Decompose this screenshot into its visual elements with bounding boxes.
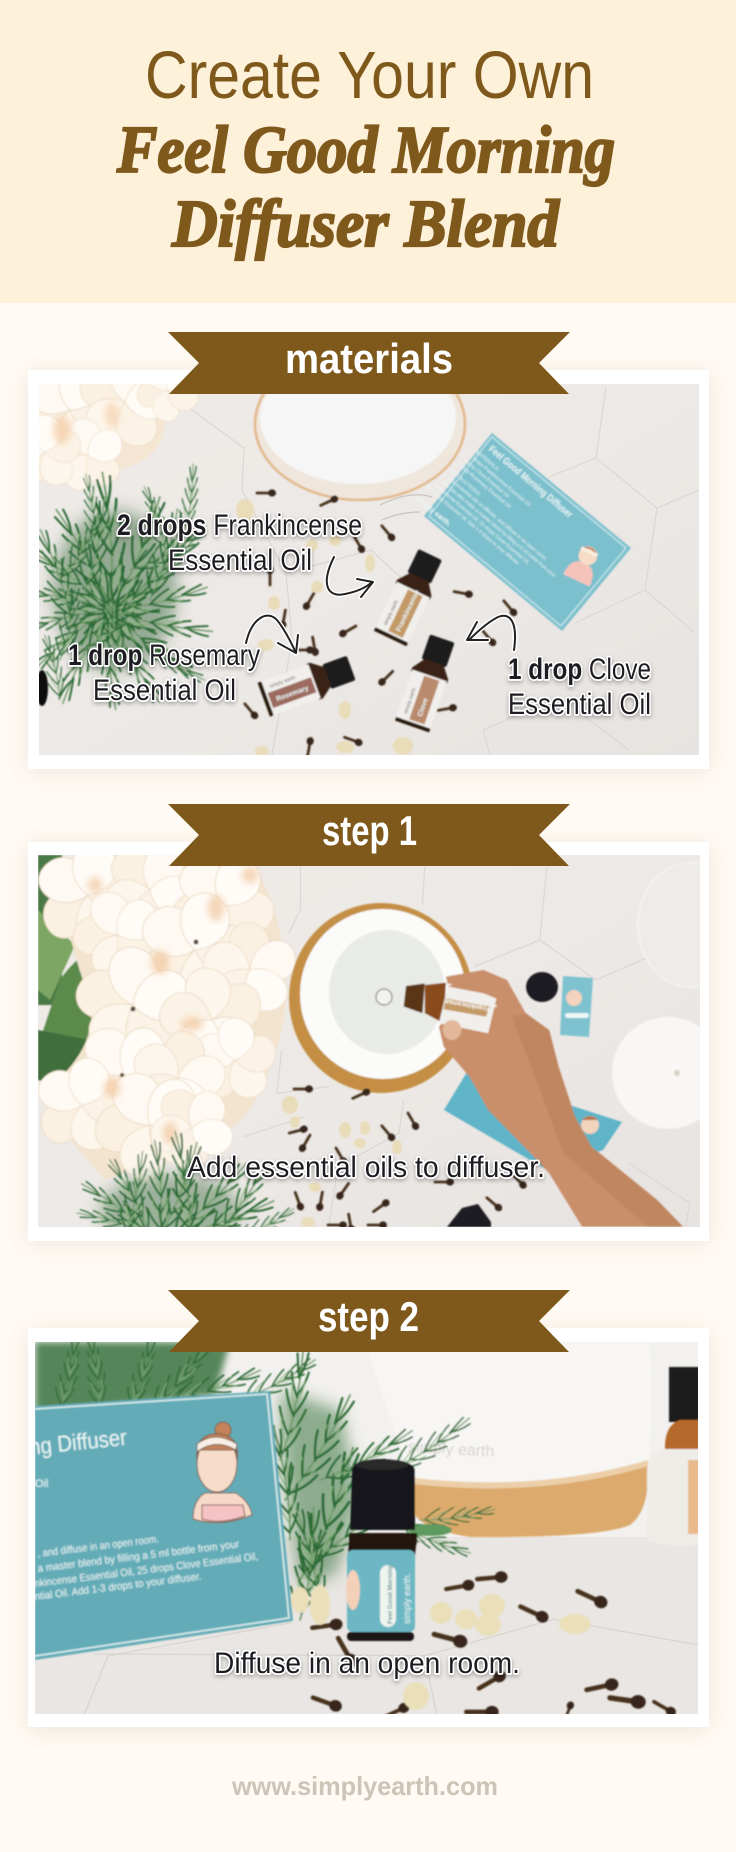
label: 1 drop rosemary: Essential Oil <box>93 674 236 707</box>
rosemary <box>76 1130 295 1227</box>
label: 2 drops frankincense: 2 drops Frankincense <box>117 509 362 542</box>
bottle: frankincense: simply earth. <box>383 598 400 626</box>
bottle: feel good morning: Feel Good Morning <box>387 1565 394 1624</box>
cloves and resin <box>236 489 519 757</box>
white diffuser <box>396 1416 648 1538</box>
flowers <box>38 855 296 1181</box>
card face icon <box>562 546 599 588</box>
cloves and resin <box>291 1571 678 1721</box>
ribbon: materials <box>168 332 570 394</box>
diffuser top view <box>253 394 467 502</box>
recipe card: Rosemary Essential Oil. Add 1-3 drops to your diffuser. <box>424 484 521 567</box>
bottle: feel good morning: simply earth. <box>402 1573 412 1624</box>
bottle label text: Frankincense <box>445 997 490 1012</box>
title: Diffuser Blend <box>171 187 560 261</box>
cloves and resin <box>282 1085 528 1233</box>
card face illustration <box>193 1422 252 1523</box>
far bottle <box>647 1367 699 1546</box>
label: 1 drop clove <box>508 653 651 721</box>
label: 1 drop rosemary <box>68 639 260 707</box>
bottle: frankincense: Frankincense <box>395 589 421 633</box>
flowers <box>39 384 199 491</box>
white diffuser: simply earth <box>408 1439 495 1461</box>
header band <box>0 0 736 303</box>
bottle: clove <box>394 632 460 733</box>
bottle: clove: Clove <box>417 697 430 718</box>
title: Feel Good Morning <box>116 113 615 187</box>
bottle: rosemary <box>257 650 358 718</box>
ribbon: step 1 <box>168 804 570 866</box>
panel: materials <box>0 332 709 769</box>
recipe card: 2 drops Frankincense Essential Oil <box>468 454 531 508</box>
title <box>116 38 615 261</box>
photo: adding oil to diffuser <box>38 855 700 1227</box>
recipe card: INSTRUCTIONS: <box>448 468 482 498</box>
recipe card <box>414 428 631 631</box>
recipe card: Feel Good Morning Diffuser <box>486 444 574 520</box>
recipe card: ntial Oil. Add 1-3 drops to your diffuser. <box>34 1571 202 1603</box>
rosemary <box>35 1333 497 1621</box>
recipe card: 2. You can also make a master blend by filling a 5 ml bottle from your <box>436 476 557 579</box>
photo: diffuse in open room <box>28 1333 699 1721</box>
hand with bottle <box>404 970 683 1227</box>
panel: step 1 <box>22 804 736 1250</box>
bottle: rosemary: simply earth. <box>269 674 297 690</box>
bottle: clove: simply earth. <box>403 686 418 715</box>
bottle: frankincense <box>373 546 447 647</box>
recipe card: 1 drop Rosemary Essential Oil <box>456 462 512 510</box>
panel: step 2 <box>28 1290 709 1727</box>
recipe card <box>28 1391 293 1660</box>
footer url: www.simplyearth.com <box>231 1771 498 1801</box>
ribbon: step 1: step 1 <box>322 807 417 854</box>
title: Create Your Own <box>145 38 594 113</box>
arrow: to rosemary <box>246 616 298 653</box>
label: 2 drops frankincense <box>117 509 362 577</box>
recipe card: Frankincense Essential Oil, 25 drops Clove Essential Oil, <box>430 480 531 566</box>
caption: step 1: Add essential oils to diffuser. <box>187 1151 545 1184</box>
arrow: to clove <box>467 616 515 650</box>
small teal card and cap <box>526 972 593 1037</box>
label: 1 drop clove: Essential Oil <box>508 688 651 721</box>
recipe card: simply earth. <box>414 495 452 528</box>
recipe card: 1 drop Clove Essential Oil <box>462 458 510 499</box>
diffuser base <box>289 903 473 1093</box>
recipe card: 1. Add essential oils to diffuser, and diffuse in an open room. <box>442 472 548 562</box>
white lid <box>612 863 700 1129</box>
arrow: to frankincense <box>327 557 373 597</box>
recipe card: nkincense Essential Oil, 25 drops Clove Essential Oil, <box>34 1551 259 1590</box>
leaves <box>38 855 92 1082</box>
recipe card: a master blend by filling a 5 ml bottle from your <box>37 1538 240 1575</box>
teal recipe card under hand <box>444 1072 622 1170</box>
recipe card: Oil <box>35 1478 48 1490</box>
ribbon: step 2: step 2 <box>318 1293 419 1340</box>
caption: step 2: Diffuse in an open room. <box>214 1647 520 1680</box>
ribbon: materials: materials <box>285 335 453 382</box>
rosemary <box>24 463 215 711</box>
photo: materials flat lay <box>39 384 699 755</box>
recipe card: ng Diffuser <box>28 1424 128 1460</box>
recipe card: MATERIALS: <box>474 449 501 473</box>
recipe card: , and diffuse in an open room. <box>37 1533 159 1560</box>
ribbon: step 2 <box>168 1290 570 1352</box>
label: 2 drops frankincense: Essential Oil <box>168 544 312 577</box>
bottle: feel good morning <box>346 1459 417 1641</box>
label: 1 drop rosemary: 1 drop Rosemary <box>68 639 260 672</box>
bottle: rosemary: Rosemary <box>275 685 310 703</box>
label: 1 drop clove: 1 drop Clove <box>508 653 651 686</box>
card face <box>581 1116 599 1134</box>
